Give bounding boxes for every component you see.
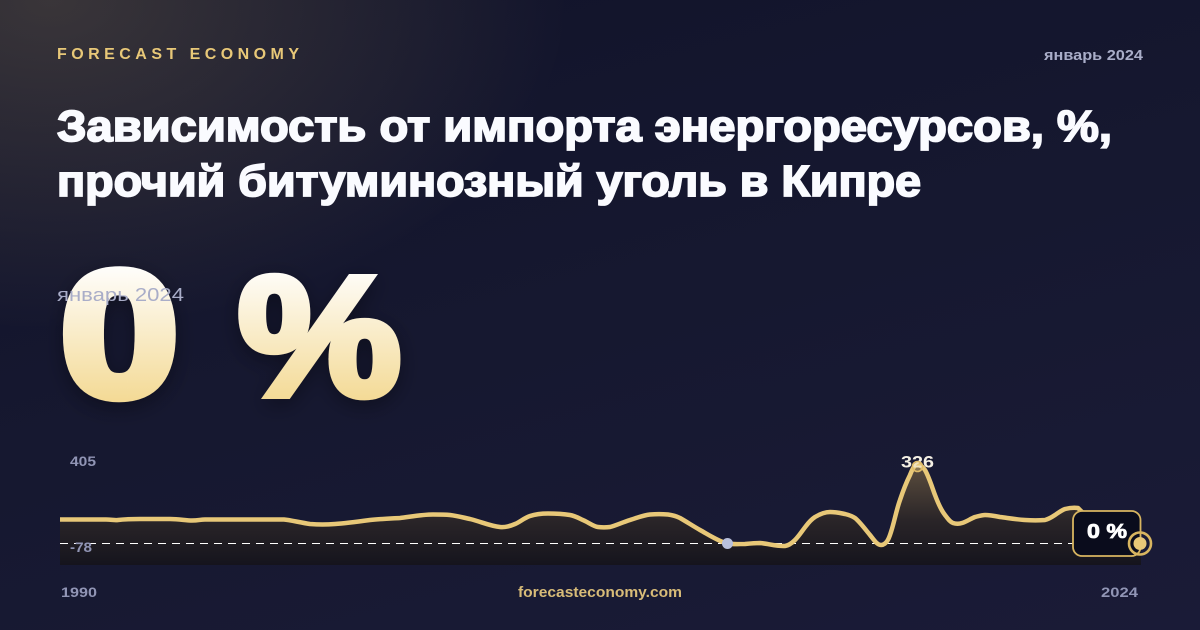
big value: % <box>238 242 401 432</box>
current point marker <box>1129 532 1151 554</box>
start year: 1990 <box>61 584 97 600</box>
date under title: январь 2024 <box>57 284 184 305</box>
brand label: FORECAST ECONOMY <box>57 46 299 63</box>
title: прочий битуминозный уголь в Кипре <box>57 157 921 206</box>
end year: 2024 <box>1101 584 1138 600</box>
big value: 0 <box>60 234 178 434</box>
date top right: январь 2024 <box>1044 48 1143 64</box>
line chart <box>60 454 1151 565</box>
axis max label: 405 <box>70 454 97 469</box>
axis min label: -78 <box>70 540 93 555</box>
current value callout: 0 % <box>1087 521 1127 543</box>
min point marker <box>722 538 733 549</box>
title: Зависимость от импорта энергоресурсов, %, <box>57 102 1112 151</box>
data line <box>60 465 1084 546</box>
chart area fill <box>60 465 1141 565</box>
source site: forecasteconomy.com <box>518 585 682 601</box>
title <box>57 102 1112 206</box>
peak marker <box>912 462 922 472</box>
current value callout <box>1073 511 1140 556</box>
big value <box>60 234 401 434</box>
reference dashed line <box>60 542 1141 544</box>
peak value label: 326 <box>901 454 934 472</box>
